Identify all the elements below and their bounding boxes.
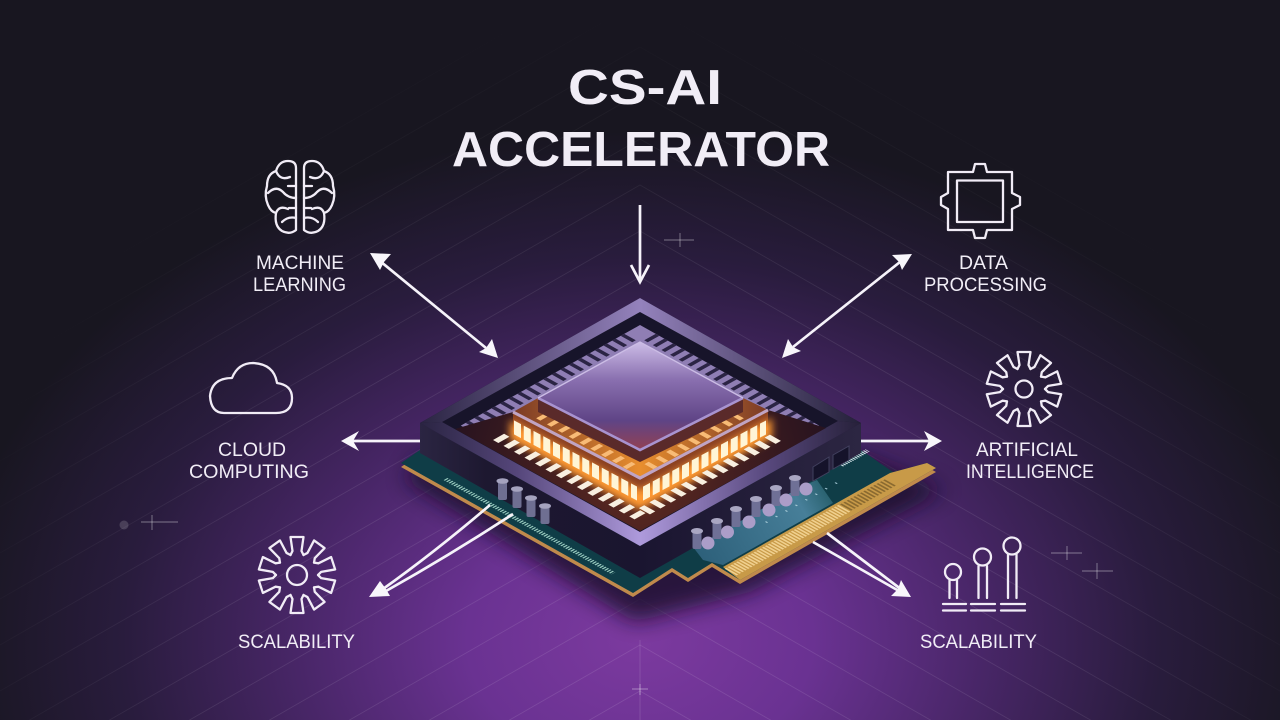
label: artificial intelligence <box>966 440 1094 483</box>
label: scalability right: SCALABILITY <box>920 632 1037 653</box>
label: cloud computing: COMPUTING <box>189 462 309 483</box>
icon: brain <box>266 161 334 233</box>
label: data processing: DATA <box>959 253 1008 274</box>
label: machine learning: LEARNING <box>253 275 346 296</box>
arrow: machine learning <box>370 253 498 358</box>
label: data processing <box>924 253 1047 296</box>
icon: scalability gear <box>259 537 335 613</box>
left capacitors <box>496 478 551 524</box>
label: cloud computing <box>189 440 309 483</box>
icon: cloud <box>210 363 292 413</box>
arrow: scalability left <box>369 505 513 597</box>
lead fingers <box>461 325 819 526</box>
right capacitors <box>691 475 812 550</box>
label: cloud computing: CLOUD <box>218 440 286 461</box>
arrow: title to chip <box>631 205 649 282</box>
label: scalability left: SCALABILITY <box>238 632 355 653</box>
contact pads <box>499 358 784 517</box>
label: machine learning: MACHINE <box>256 253 344 274</box>
background grid lines <box>42 124 1238 720</box>
icon: data processor <box>941 164 1020 238</box>
icon: scaling bars <box>943 538 1025 610</box>
chip side walls <box>420 423 861 578</box>
die package <box>455 342 826 531</box>
circuit board <box>401 346 936 606</box>
arrow: cloud computing <box>341 431 420 451</box>
arrow: artificial intelligence <box>861 431 942 451</box>
label: artificial intelligence: INTELLIGENCE <box>966 462 1094 483</box>
arrow: scalability right <box>813 533 911 597</box>
title: ACCELERATOR <box>452 123 830 177</box>
chip shadow <box>405 455 945 622</box>
chip frame <box>420 298 861 546</box>
label: artificial intelligence: ARTIFICIAL <box>976 440 1078 461</box>
label: data processing: PROCESSING <box>924 275 1047 296</box>
title <box>452 61 830 177</box>
sparkle decorations <box>120 233 1113 695</box>
glowing lights <box>510 418 772 510</box>
title: CS-AI <box>568 61 722 115</box>
label: machine learning <box>253 253 346 296</box>
icon: neural gear <box>987 352 1061 426</box>
accelerator chip <box>401 298 936 606</box>
arrow: data processing <box>782 254 912 358</box>
